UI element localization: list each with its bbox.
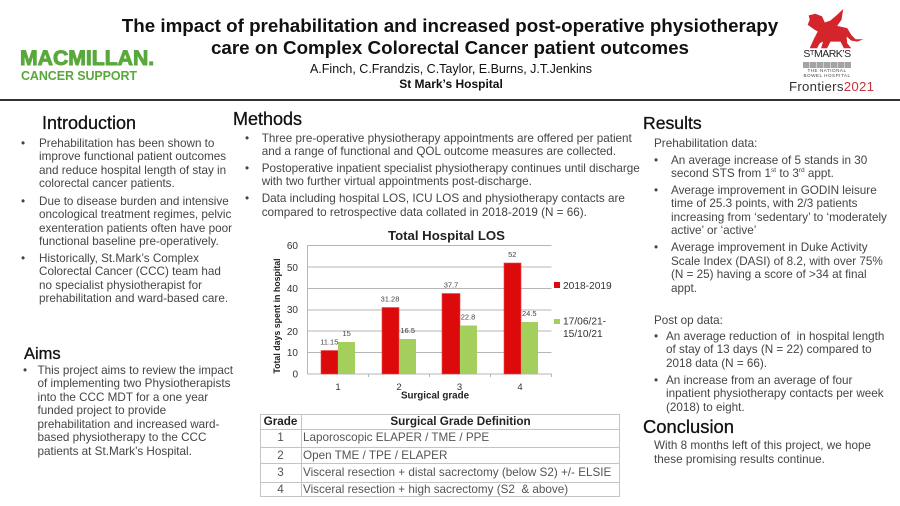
text: methods bullets: Three pre-operative physiotherapy appointments are offered per patient: [262, 132, 632, 144]
text: conclusion: [654, 439, 871, 466]
logo: Macmillan Cancer Support: [20, 47, 154, 83]
legend: 17/06/21-: [563, 316, 606, 328]
data labels: 16.5: [400, 326, 415, 335]
text: aims: of implementing two Physiotherapists: [38, 377, 230, 390]
text: methods bullets: with two further virtual appointments post-discharge.: [262, 175, 532, 188]
y axis labels: 60: [287, 241, 298, 252]
text: aims: into the CCC MDT for a one year: [38, 391, 208, 404]
icon: red winged lion: [808, 9, 864, 48]
text: introduction bullets: colorectal cancer patients.: [39, 177, 175, 190]
frontiers label: Frontiers2021: [789, 79, 874, 94]
text: aims: patients at St.Mark’s Hospital.: [38, 445, 192, 458]
text: prehabilitation data: Average improvement in GODIN leisure: [671, 184, 877, 196]
x axis labels: [335, 382, 523, 393]
text: post op data: An average reduction of in hospital length: [666, 330, 884, 343]
data labels: 52: [508, 250, 516, 259]
text: prehabilitation data: active’ or ‘active’: [671, 224, 756, 237]
text: conclusion: these promising results continue.: [654, 453, 825, 466]
table: surgical grade definitions: [260, 414, 620, 497]
table header: [264, 415, 531, 428]
tagline: [803, 68, 851, 78]
y axis labels: 10: [287, 348, 298, 359]
text: introduction bullets: Historically, St.Mark’s Complex: [39, 252, 199, 264]
text: post op data: •: [654, 330, 658, 343]
text: prehabilitation data: An average increase of 5 stands in 30: [671, 154, 867, 166]
text: methods bullets: Postoperative inpatient specialist physiotherapy continues until discharge: [262, 162, 640, 174]
x axis title: Surgical grade: [401, 390, 470, 402]
table header: Grade: [264, 415, 297, 428]
text: introduction bullets: improve functional patient outcomes: [39, 150, 226, 163]
legend: [554, 281, 612, 340]
text: introduction bullets: •: [21, 194, 25, 208]
text: methods bullets: •: [245, 162, 249, 174]
text: aims: prehabilitation and increased ward-: [38, 418, 219, 431]
row 3: 3: [277, 466, 284, 479]
text: post op data: (2018) to eight.: [666, 401, 745, 414]
logo: Macmillan Cancer Support: CANCER SUPPORT: [21, 69, 137, 83]
header rule: [0, 99, 900, 101]
text: introduction bullets: Colorectal Cancer (CCC) team had: [39, 265, 221, 278]
heading: methods: Methods: [233, 109, 302, 129]
text: introduction bullets: Due to disease burden and intensive: [39, 194, 229, 208]
text: post op data: An increase from an average of four: [666, 374, 852, 387]
panel: methods: [233, 109, 640, 219]
wordmark: STMARK’S: [803, 48, 851, 60]
x axis labels: 3: [457, 382, 462, 393]
row 4: 4: [277, 483, 284, 496]
text: post op data: 2018 data (N = 66).: [666, 357, 767, 370]
text: introduction bullets: no specialist physiotherapist for: [39, 279, 202, 292]
y axis title: Total days spent in hospital: [272, 258, 282, 374]
tagline: THE NATIONAL: [807, 68, 847, 73]
row 2: Open TME / TPE / ELAPER: [303, 449, 447, 462]
grey band: [803, 62, 851, 68]
text: prehabilitation data: •: [654, 184, 658, 196]
text: methods bullets: •: [245, 192, 249, 205]
bar chart: total hospital LOS: [272, 228, 612, 402]
panel: introduction: [21, 113, 232, 305]
data labels: 22.8: [461, 312, 475, 322]
text: methods bullets: •: [245, 132, 249, 144]
title: The impact of prehabilitation and increased post-operative physiotherapy: [122, 15, 778, 36]
text: introduction bullets: functional baseline pre-operatively.: [39, 235, 219, 248]
row 1: Laporoscopic ELAPER / TME / PPE: [303, 431, 489, 444]
text: prehabilitation data: [654, 136, 887, 295]
data labels: 11.15: [320, 338, 338, 346]
row 3: Visceral resection + distal sacrectomy (below S2) +/- ELSIE: [303, 466, 611, 479]
text: introduction bullets: prehabilitation and ward-based care.: [39, 292, 228, 305]
text: prehabilitation data: •: [654, 154, 658, 166]
row 2: 2: [277, 449, 284, 462]
authors: A.Finch, C.Frandzis, C.Taylor, E.Burns, J.T.Jenkins: [310, 62, 592, 76]
title: care on Complex Colorectal Cancer patient outcomes: [211, 36, 689, 58]
data labels: [320, 250, 537, 346]
heading: conclusion: Conclusion: [643, 416, 734, 437]
legend: 15/10/21: [563, 329, 603, 340]
panel: results: [643, 113, 887, 414]
text: prehabilitation data: time of 25.3 points, with 2/3 patients: [671, 197, 857, 210]
heading: introduction: Introduction: [42, 113, 136, 133]
text: prehabilitation data: Scale Index (DASI) of 8.2, with over 75%: [671, 255, 883, 268]
heading: aims: Aims: [24, 345, 61, 363]
text: post op data: of stay of 13 days (N = 22) compared to: [666, 343, 872, 356]
text: introduction bullets: [21, 136, 232, 305]
x axis labels: 4: [517, 382, 523, 393]
text: introduction bullets: oncological treatment regimes, pelvic: [39, 208, 231, 221]
heading: results: Results: [643, 113, 702, 133]
text: methods bullets: compared to retrospective data collated in 2018-2019 (N = 66).: [262, 206, 587, 219]
text: aims: This project aims to review the impact: [38, 364, 233, 376]
text: post op data: inpatient physiotherapy contacts per week: [666, 387, 884, 400]
title: [122, 15, 778, 58]
text: prehabilitation data: •: [654, 241, 658, 254]
text: aims: funded project to provide: [38, 404, 166, 417]
data labels: 37.7: [444, 281, 458, 290]
data labels: 24.5: [522, 309, 537, 318]
text: methods bullets: and a range of functional and QOL outcome measures are collected.: [262, 145, 616, 158]
y axis labels: 40: [287, 284, 298, 295]
text: prehabilitation data: increasing from ‘sedentary’ to ‘moderately: [671, 211, 887, 224]
data labels: 15: [343, 329, 351, 338]
y axis labels: 30: [287, 305, 298, 316]
row 1: 1: [277, 431, 284, 444]
text: introduction bullets: Prehabilitation has been shown to: [39, 136, 214, 150]
text: post op data: •: [654, 374, 658, 387]
text: aims: •: [23, 364, 27, 376]
text: prehabilitation data: (N = 25) having a score of >34 at final: [671, 268, 867, 281]
y axis labels: [287, 241, 298, 380]
panel: conclusion: [643, 416, 871, 466]
text: introduction bullets: and reduce hospital length of stay in: [39, 164, 226, 177]
y axis labels: 0: [292, 370, 298, 380]
series: 2018-2019 bars: [321, 263, 521, 374]
text: prehabilitation data: second STS from 1st to 3rd appt.: [671, 167, 834, 180]
text: aims: [23, 364, 233, 458]
tagline: BOWEL HOSPITAL: [803, 73, 851, 78]
text: prehabilitation data: appt.: [671, 282, 697, 295]
text: introduction bullets: •: [21, 252, 25, 264]
text: introduction bullets: exenteration patients often have poor: [39, 222, 232, 235]
text: prehabilitation data: Prehabilitation data:: [654, 136, 757, 150]
text: post op data: Post op data:: [654, 314, 723, 327]
text: post op data: [654, 314, 884, 414]
table header: Surgical Grade Definition: [390, 415, 531, 428]
text: aims: based physiotherapy to the CCC: [38, 431, 206, 444]
row 4: Visceral resection + high sacrectomy (S2 & above): [303, 483, 568, 496]
y axis labels: 50: [287, 263, 298, 274]
y axis labels: 20: [287, 327, 298, 338]
text: methods bullets: Data including hospital LOS, ICU LOS and physiotherapy contacts are: [262, 192, 625, 205]
series: 17/06/21-15/10/21 bars: [338, 322, 538, 374]
hospital name: St Mark’s Hospital: [399, 77, 503, 91]
legend: 2018-2019: [563, 281, 612, 292]
data labels: 31.28: [381, 295, 399, 304]
panel: aims: [23, 345, 233, 458]
text: conclusion: With 8 months left of this project, we hope: [654, 439, 871, 452]
x axis labels: 2: [396, 382, 402, 393]
text: introduction bullets: •: [21, 136, 25, 150]
logo: St Mark's Frontiers 2021: [789, 9, 874, 94]
chart title: Total Hospital LOS: [388, 228, 505, 243]
text: prehabilitation data: Average improvement in Duke Activity: [671, 241, 868, 254]
text: methods bullets: [245, 132, 640, 219]
x axis labels: 1: [335, 382, 341, 393]
logo: Macmillan Cancer Support: MACMILLAN.: [20, 47, 154, 70]
